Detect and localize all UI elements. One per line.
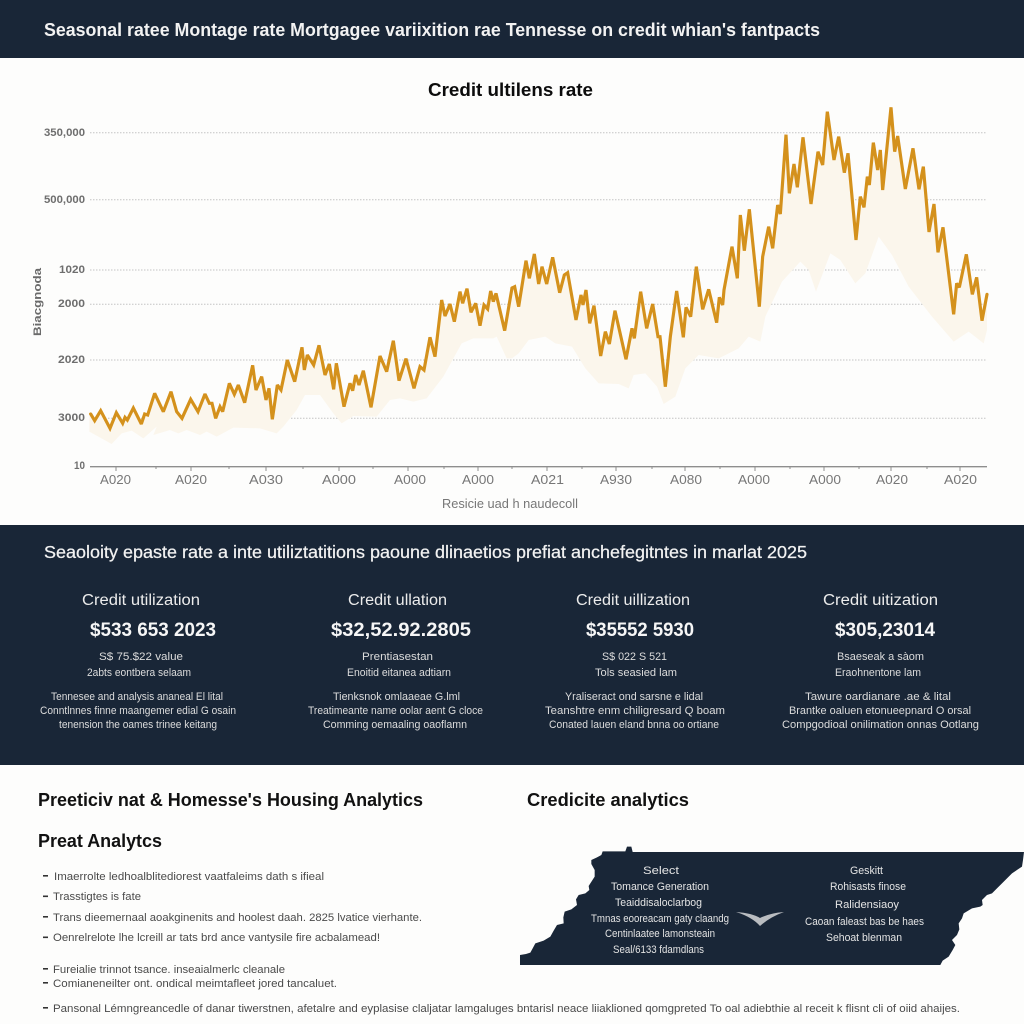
stat column 3: Teanshtre enm chiligresard Q boam — [545, 705, 725, 717]
stat column 4: Eraohnentone lam — [835, 667, 921, 679]
map text: left column: Select — [643, 865, 679, 877]
stat column 4: Tawure oardianare .ae & lital — [805, 691, 951, 703]
map text: right column: Rohisasts finose — [830, 881, 906, 893]
map text: right column: Caoan faleast bas be haes — [805, 916, 924, 928]
stat column 4: Brantke oaluen etonueepnard O orsal — [789, 705, 971, 717]
area band: right half — [512, 107, 987, 404]
stat column 1: 2abts eontbera selaam — [87, 667, 191, 679]
map heading: Credicite analytics — [527, 790, 689, 810]
y axis labels: 500,000 — [44, 194, 85, 206]
stat column 2: Enoitid eitanea adtiarn — [347, 667, 451, 679]
map text: right column — [805, 865, 924, 944]
bullet list: Trasstigtes is fate — [53, 891, 141, 903]
map text: right column: Geskitt — [850, 865, 883, 877]
x axis labels: A000 — [738, 473, 770, 487]
title: Seasonal ratee Montage rate Mortgagee variixition rae Tennesse on credit whian's fantpacts — [44, 20, 820, 40]
bullet list: Trans dieemernaal aoakginenits and hoolest daah. 2825 lvatice vierhante. — [53, 912, 422, 924]
stat column 4: Credit uitization — [823, 592, 938, 609]
y axis labels: 350,000 — [44, 127, 85, 139]
panel: line chart — [32, 79, 987, 511]
y axis title: Biacgnoda — [32, 267, 44, 336]
sub heading: Preat Analytcs — [38, 831, 162, 851]
y axis labels: 2000 — [58, 298, 85, 310]
bullet list: Imaerrolte ledhoalblitediorest vaatfaleims dath s ifieal — [54, 871, 324, 883]
y axis labels: 3000 — [58, 412, 85, 424]
stat column 3: Conated lauen eland bnna oo ortiane — [549, 719, 719, 731]
x axis labels: A080 — [670, 473, 702, 487]
stat column 1: Conntlnnes finne maangemer edial G osain — [40, 705, 236, 717]
map text: left column: Tomance Generation — [611, 881, 709, 893]
map text: right column: Ralidensiaoy — [835, 899, 900, 911]
x axis labels — [100, 473, 977, 487]
stat column 2: $32,52.92.2805 — [331, 620, 471, 641]
stat column 2: Credit ullation — [348, 592, 447, 609]
stat column 1: $533 653 2023 — [90, 620, 216, 641]
stat column 2: Treatimeante name oolar aent G cloce — [308, 705, 483, 717]
x axis labels: A930 — [600, 473, 632, 487]
data line: right half — [512, 107, 987, 387]
panel: credit analytics map — [520, 790, 1024, 965]
stat column 4: Compgodioal onilimation onnas Ootlang — [782, 719, 979, 731]
map text: left column: Seal/6133 fdamdlans — [613, 944, 704, 956]
x axis labels: A000 — [462, 473, 494, 487]
stat column 4 — [782, 592, 979, 731]
stat column 3 — [545, 592, 725, 731]
bullet list: Pansonal Lémngreancedle of danar tiwerstnen, afetalre and eyplasise claljatar lamgaluges bntarisl neace liiaklioned qomgpreted To oal adiebthie al receit k flisnt cli of oiid ahaijes. — [53, 1003, 960, 1015]
x axis labels: A021 — [531, 473, 564, 487]
data line: left half — [91, 288, 512, 428]
header banner — [0, 0, 1024, 58]
map text: left column: Centinlaatee lamonsteain — [605, 928, 715, 940]
icon: swoosh — [736, 912, 784, 926]
stat column 4: $305,23014 — [835, 620, 935, 641]
stat column 3: Tols seasied lam — [595, 667, 677, 679]
x axis labels: A000 — [809, 473, 841, 487]
stat column 3: S$ 022 S 521 — [602, 651, 667, 663]
bullet list: Comianeneilter ont. ondical meimtafleet jored tancaluet. — [53, 978, 337, 990]
map: Tennessee silhouette — [520, 847, 1024, 965]
map text: left column — [591, 865, 729, 956]
y axis labels: 1020 — [59, 264, 85, 276]
chart title: Credit ultilens rate — [428, 79, 593, 100]
map text: right column: Sehoat blenman — [826, 932, 902, 944]
x axis title: Resicie uad h naudecoll — [442, 497, 578, 511]
stat column 1: tenension the oames trinee keitang — [59, 719, 217, 731]
x axis labels: A020 — [175, 473, 207, 487]
stat column 1: Tennesee and analysis ananeal El lital — [51, 691, 223, 703]
stat column 3: Yraliseract ond sarsne e lidal — [565, 691, 703, 703]
bullet list — [43, 871, 960, 1015]
stat column 2: Tienksnok omlaaeae G.lml — [333, 691, 460, 703]
y axis labels: 10 — [74, 460, 85, 472]
area band: left half — [89, 288, 512, 444]
x axis labels: A030 — [249, 473, 283, 487]
x axis labels: A020 — [100, 473, 131, 487]
panel: predictive analytics — [38, 790, 960, 1015]
stat column 1 — [40, 592, 236, 731]
stat column 3: Credit uillization — [576, 592, 690, 609]
map text: left column: Tmnas eooreacam gaty claandg — [591, 913, 729, 925]
stat column 3: $35552 5930 — [586, 620, 694, 641]
bullet list: Oenrelrelote lhe lcreill ar tats brd ance vantysile fire acbalamead! — [53, 932, 380, 944]
stat column 2: Prentiasestan — [362, 651, 433, 663]
x axis labels: A020 — [944, 473, 977, 487]
stat column 2 — [308, 592, 483, 731]
y axis labels — [44, 127, 85, 472]
panel: credit utilization stats — [0, 525, 1024, 765]
section heading: Preeticiv nat & Homesse's Housing Analytics — [38, 790, 423, 810]
y axis labels: 2020 — [58, 354, 85, 366]
stats heading: Seaoloity epaste rate a inte utiliztatitions paoune dlinaetios prefiat anchefegitntes in marlat 2025 — [44, 542, 807, 562]
stat column 1: Credit utilization — [82, 592, 200, 609]
stat column 1: S$ 75.$22 value — [99, 651, 183, 663]
stat column 2: Comming oemaaling oaoflamn — [323, 719, 467, 731]
x axis — [90, 467, 987, 471]
bullet list: Fureialie trinnot tsance. inseaialmerlc cleanale — [53, 964, 285, 976]
x axis labels: A000 — [322, 473, 356, 487]
x axis labels: A000 — [394, 473, 426, 487]
stat column 4: Bsaeseak a sàom — [837, 651, 924, 663]
map text: left column: Teaiddisaloclarbog — [615, 897, 702, 909]
x axis labels: A020 — [876, 473, 908, 487]
